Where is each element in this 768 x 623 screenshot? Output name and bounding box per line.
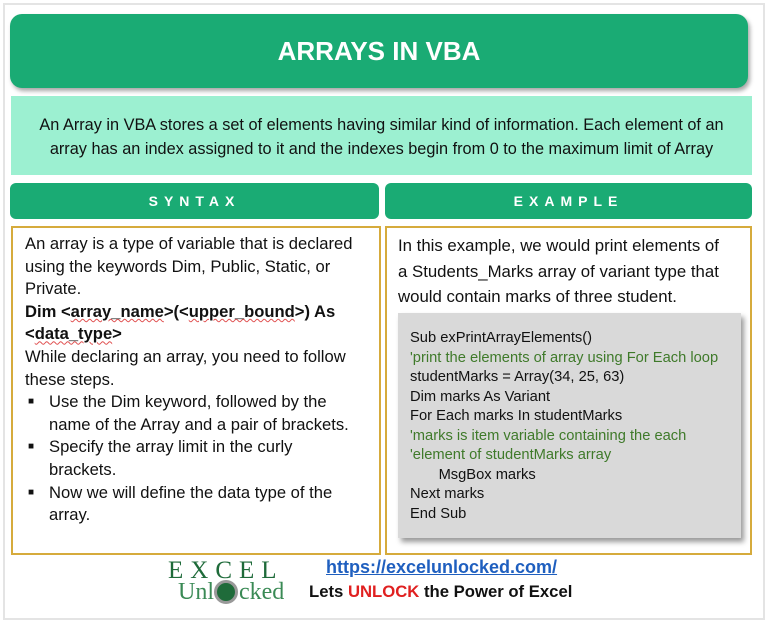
panel: syntax: Use the Dim keyword, followed by the	[49, 392, 327, 411]
panel: example: a Students_Marks array of variant type that	[398, 262, 719, 280]
logo	[168, 557, 284, 605]
panel: syntax: While declaring an array, you need to follow	[25, 347, 346, 366]
panel: syntax	[11, 226, 381, 555]
panel: syntax: ■	[28, 487, 34, 498]
title	[10, 14, 748, 88]
code block: 'marks is item variable containing the each	[410, 428, 686, 444]
panel: syntax: brackets.	[49, 460, 116, 479]
panel: example	[385, 226, 752, 555]
panel: syntax: <data_type>	[25, 324, 122, 343]
code block: studentMarks = Array(34, 25, 63)	[410, 369, 624, 385]
logo: Unl	[178, 579, 214, 605]
code block: MsgBox marks	[439, 466, 536, 482]
panel: syntax: An array is a type of variable that is declared	[25, 234, 352, 253]
code block: Sub exPrintArrayElements()	[410, 330, 592, 346]
panel: example: would contain marks of three student.	[398, 287, 677, 306]
heading: syntax: SYNTAX	[149, 193, 240, 209]
panel: example: In this example, we would print elements of	[398, 236, 719, 255]
description: An Array in VBA stores a set of elements having similar kind of information. Each element of an	[39, 116, 724, 134]
panel: syntax: name of the Array and a pair of brackets.	[49, 415, 349, 434]
description	[11, 96, 752, 175]
heading: example: EXAMPLE	[514, 193, 623, 209]
logo: cked	[239, 579, 284, 605]
panel: syntax: ■	[28, 396, 34, 407]
logo: EXCEL	[168, 557, 284, 584]
panel: syntax: these steps.	[25, 370, 114, 389]
panel: syntax: Specify the array limit in the curly	[49, 437, 292, 456]
title: ARRAYS IN VBA	[278, 36, 480, 66]
description: array has an index assigned to it and the indexes begin from 0 to the maximum limit of Array	[50, 140, 713, 158]
code block: End Sub	[410, 506, 466, 522]
panel: syntax: Private.	[25, 279, 81, 298]
tagline: Lets UNLOCK the Power of Excel	[309, 582, 572, 601]
code block: Dim marks As Variant	[410, 388, 550, 404]
code block: For Each marks In studentMarks	[410, 408, 622, 424]
code block: Next marks	[410, 486, 484, 502]
panel: syntax: Now we will define the data type of the	[49, 483, 332, 502]
code block: 'print the elements of array using For Each loop	[410, 350, 718, 366]
heading: syntax	[10, 183, 379, 219]
panel: syntax: using the keywords Dim, Public, Static, or	[25, 257, 330, 276]
panel: syntax: array.	[49, 505, 90, 524]
code block	[398, 313, 741, 538]
url: https://excelunlocked.com/	[326, 557, 557, 577]
code block: 'element of studentMarks array	[410, 447, 611, 463]
panel: syntax: Dim <array_name>(<upper_bound>) As	[25, 302, 335, 321]
panel: syntax: ■	[28, 441, 34, 452]
heading: example	[385, 183, 752, 219]
